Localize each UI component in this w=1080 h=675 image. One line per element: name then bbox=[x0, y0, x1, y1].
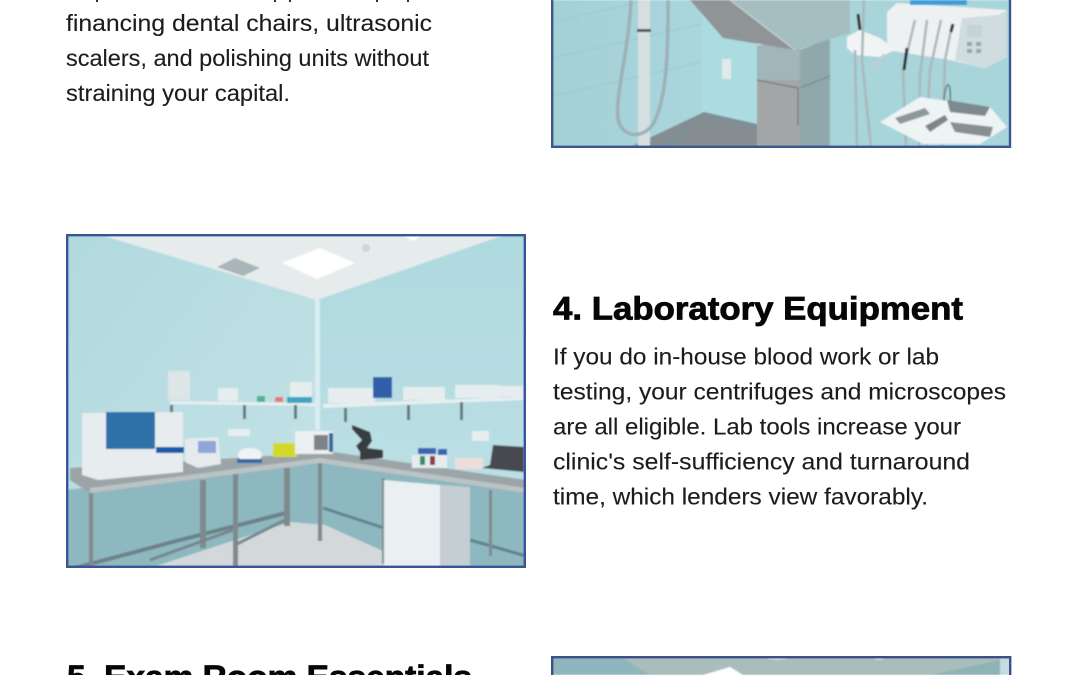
photo: exam room bbox=[551, 656, 1011, 675]
dental unit bbox=[887, 3, 1007, 68]
body text: section 4: are all eligible. Lab tools increase your bbox=[553, 414, 961, 440]
body text: section 4: time, which lenders view favorably. bbox=[553, 484, 928, 510]
laptop bbox=[482, 445, 524, 472]
ceiling bbox=[97, 234, 507, 300]
blue boxes bbox=[373, 377, 392, 398]
bench top bbox=[70, 452, 526, 493]
lower wall shading bbox=[66, 460, 526, 568]
heading: section 4: 4. Laboratory Equipment bbox=[553, 290, 963, 326]
analyzer bbox=[82, 412, 183, 480]
microscope bbox=[352, 425, 383, 460]
body text: section 3: straining your capital. bbox=[66, 80, 290, 106]
floor bbox=[150, 522, 385, 568]
table legs bbox=[89, 463, 492, 568]
instrument tray bbox=[880, 97, 1007, 144]
text block: clipped end of section 3 bbox=[66, 0, 438, 106]
body text: section 4: If you do in-house blood work or lab bbox=[553, 344, 939, 370]
ceiling vent bbox=[217, 258, 260, 276]
small analyzer bbox=[185, 437, 221, 468]
microwave bbox=[295, 431, 333, 454]
floor and baseboard bbox=[630, 112, 757, 147]
test racks bbox=[412, 455, 447, 468]
ceiling light bbox=[282, 248, 355, 279]
centrifuge bbox=[238, 448, 262, 462]
yellow container bbox=[273, 443, 297, 457]
body text: section 3: scalers, and polishing units without bbox=[66, 45, 430, 71]
wall corner pipe bbox=[315, 300, 320, 430]
photo: laboratory room bbox=[66, 234, 526, 568]
steel hood bbox=[690, 0, 795, 50]
clipped descenders of the line above bbox=[96, 0, 409, 2]
walls bbox=[68, 236, 318, 490]
photo: dental equipment room bbox=[551, 0, 1011, 147]
shelves bbox=[170, 397, 523, 408]
body text: section 4: clinic's self-sufficiency and turnaround bbox=[553, 448, 970, 474]
shelf items bbox=[168, 371, 190, 400]
body text: section 3: financing dental chairs, ultrasonic bbox=[66, 10, 432, 36]
sockets bbox=[228, 429, 489, 441]
fridge bbox=[440, 485, 470, 568]
socket bbox=[722, 59, 731, 79]
steel column bbox=[756, 44, 801, 81]
handpiece hoses bbox=[855, 0, 952, 147]
pole and hose bbox=[638, 0, 650, 147]
body text: section 4: testing, your centrifuges and microscopes bbox=[553, 378, 1006, 404]
